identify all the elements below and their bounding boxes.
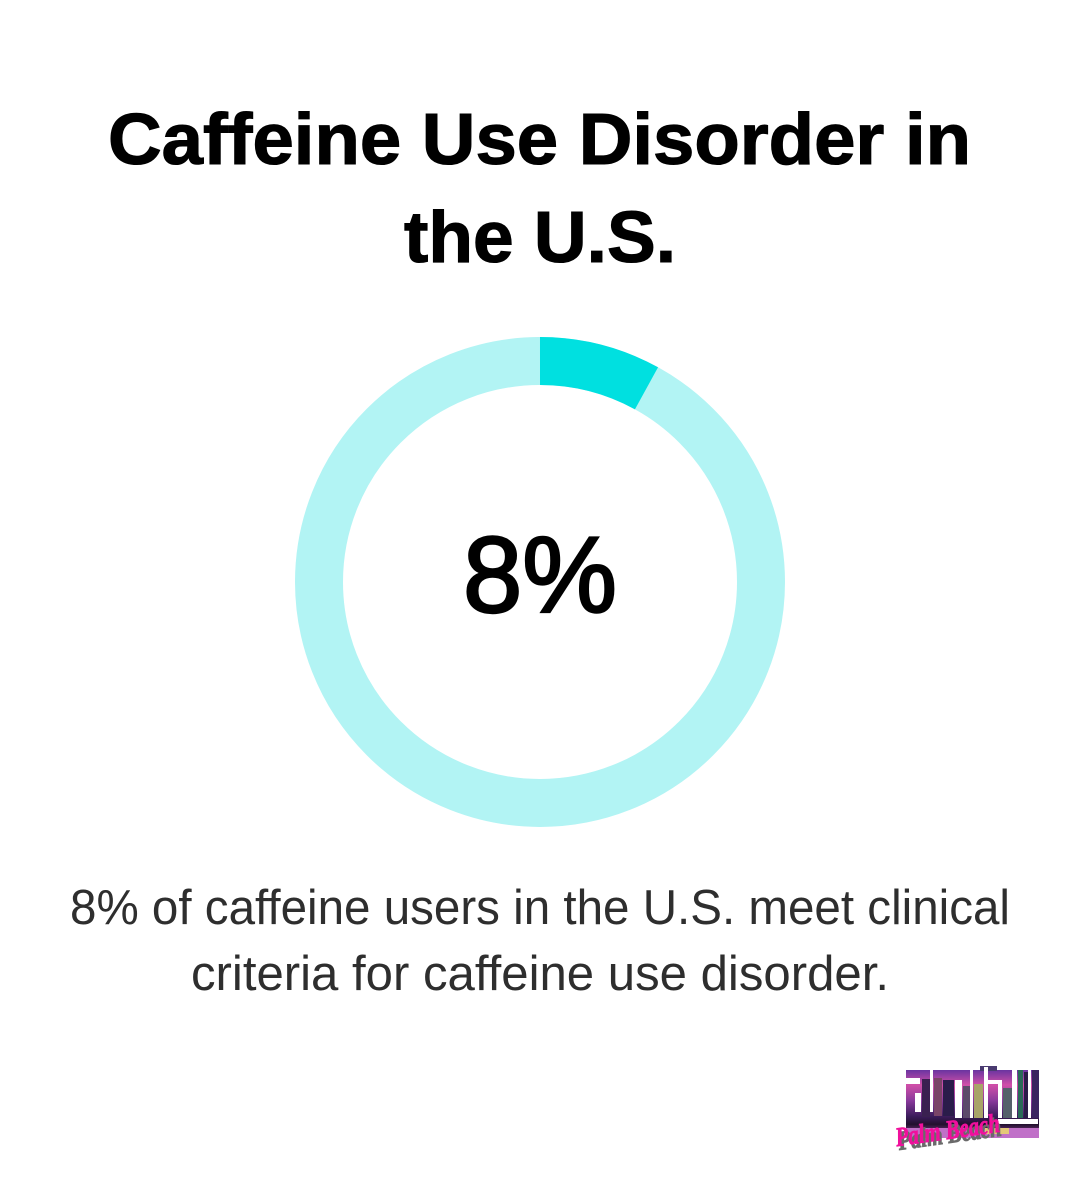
chart track xyxy=(319,361,761,803)
logo script text: Palm Beach xyxy=(893,1108,1002,1152)
title xyxy=(108,100,971,278)
title: the U.S. xyxy=(404,198,676,278)
logo city image block xyxy=(906,1066,1039,1138)
description text: 8% of caffeine users in the U.S. meet clinical xyxy=(70,881,1010,935)
logo letter gaps xyxy=(906,1067,1038,1124)
logo script text: Palm Beach xyxy=(895,1112,1003,1156)
chart value: 8% xyxy=(463,514,617,635)
description text xyxy=(70,881,1010,1001)
chart segment: 8% xyxy=(540,361,646,388)
donut chart xyxy=(319,361,761,803)
description text: criteria for caffeine use disorder. xyxy=(191,947,889,1001)
logo: amity Palm Beach xyxy=(893,1066,1039,1156)
title: Caffeine Use Disorder in xyxy=(108,100,971,180)
